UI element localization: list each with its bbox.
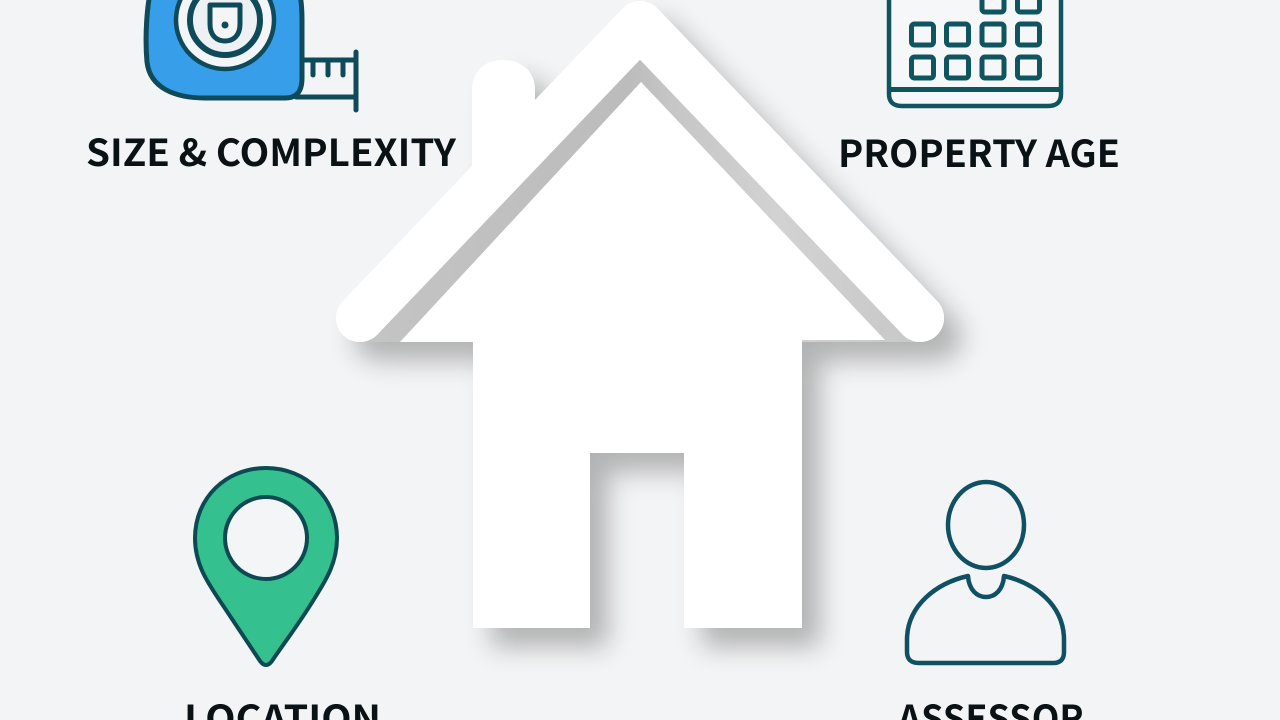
central house — [360, 25, 920, 628]
calendar frame — [889, 0, 1061, 106]
tape body — [146, 0, 302, 98]
calendar footer line — [889, 87, 1061, 92]
calendar day cells — [912, 0, 1040, 78]
icon: assessor person — [907, 482, 1064, 663]
person head — [948, 482, 1024, 568]
tape dial — [176, 0, 274, 69]
tape tab — [210, 5, 240, 41]
roof edge — [360, 25, 920, 318]
icon: calendar — [889, 0, 1061, 106]
house silhouette with door — [360, 25, 920, 628]
icon: tape measure — [146, 0, 356, 110]
label: property age: PROPERTY AGE — [838, 124, 1120, 178]
person shoulders — [907, 576, 1064, 663]
label: size and complexity: SIZE & COMPLEXITY — [86, 123, 457, 177]
icon: location pin — [195, 468, 337, 665]
tape ticks — [313, 60, 343, 75]
roof shadow band — [364, 40, 916, 342]
tape blade — [296, 52, 356, 110]
house front — [400, 82, 885, 628]
